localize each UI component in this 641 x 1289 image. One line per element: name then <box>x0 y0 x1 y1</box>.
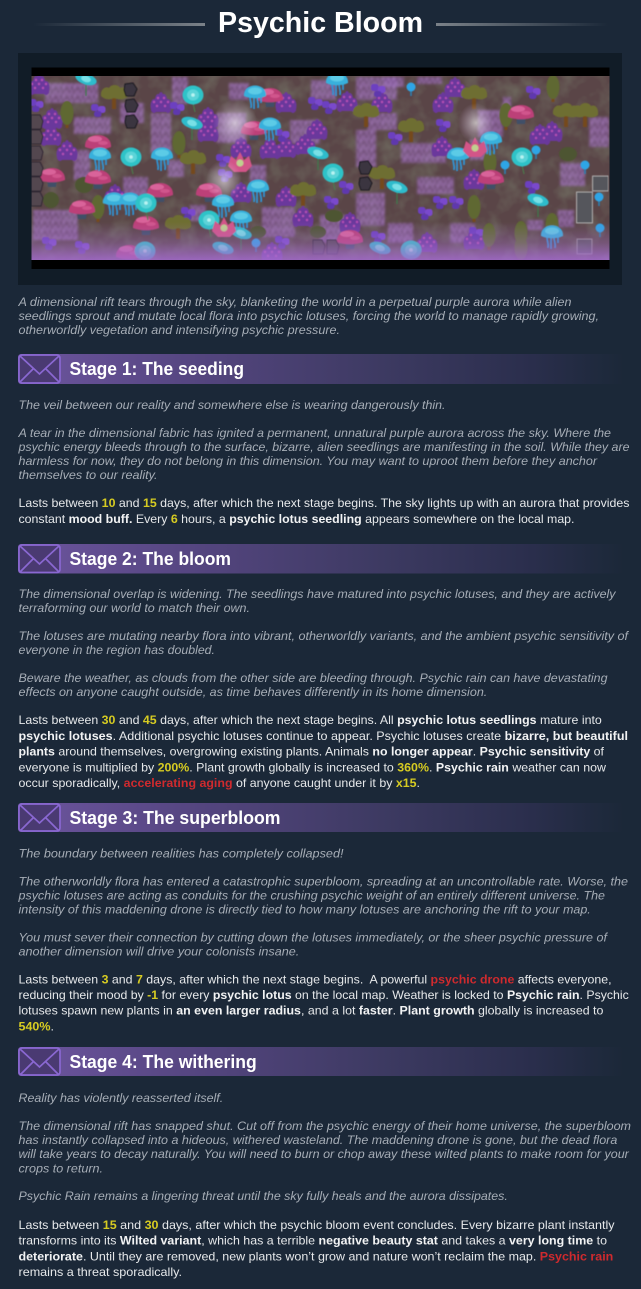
effects line 1: Lasts between 15 and 30 days, after which the psychic bloom event concludes. Every bizarre plant instantly <box>18 1218 614 1232</box>
intro text: A dimensional rift tears through the sky, blanketing the world in a perpetual purple aurora while alien <box>17 295 572 309</box>
flavour paragraph: A tear in the dimensional fabric has ignited a permanent, unnatural purple aurora across the sky. Where the <box>17 426 611 440</box>
flavour paragraph 2: The lotuses are mutating nearby flora into vibrant, otherworldly variants, and the ambient psychic sensitivity of <box>18 629 630 643</box>
stage 4 flavour text <box>18 1091 631 1203</box>
bottom aurora fog <box>32 222 610 260</box>
flavour paragraph: crops to return. <box>18 1161 103 1175</box>
flavour paragraph 2: another dimension will drive your colonists insane. <box>18 944 299 958</box>
stage 1 effects text <box>18 496 630 526</box>
flavour paragraph 1: The dimensional overlap is widening. The seedlings have matured into psychic lotuses, and they are actively <box>18 587 617 601</box>
stage 1 flavour text <box>17 398 630 482</box>
effects line 2: psychic lotuses . Additional psychic lotuses continue to appear. Psychic lotuses create bizarre, but beautiful <box>18 729 628 743</box>
title <box>33 7 608 39</box>
cypress trees <box>60 75 560 263</box>
flavour paragraph: will take years to decay naturally. You will need to burn or chop away these wilted plants to make room for your <box>18 1147 630 1161</box>
panel: scene image frame <box>18 53 622 285</box>
image frame background <box>18 53 622 285</box>
mauve rocks <box>31 115 339 254</box>
small green shrubs <box>43 147 577 238</box>
title rule left <box>33 23 205 26</box>
scene sprites <box>28 70 608 268</box>
stage 2 header <box>18 544 624 574</box>
effects line 3: lotuses spawn new plants in an even larger radius , and a lot faster. Plant growth globally is increased to <box>18 1004 604 1018</box>
stage 4 header <box>18 1047 624 1076</box>
stage 2 flavour text <box>18 587 630 699</box>
effects line 4: everyone is multiplied by 200%. Plant growth globally is increased to 360%. Psychic rain weather can now <box>18 760 606 774</box>
ground <box>32 76 610 260</box>
icon: envelope <box>19 804 60 831</box>
ground mottling <box>32 76 610 260</box>
stage 1 header <box>18 354 624 384</box>
blue jellyfish plants <box>89 72 563 249</box>
flavour paragraph: has instantly collapsed into a hideous, withered wasteland. The maddening drone is gone, but the dead flora <box>18 1133 618 1147</box>
stage 3 title: Stage 3: The superbloom <box>70 808 280 828</box>
header bar <box>18 354 624 384</box>
intro text: otherworldly vegetation and intensifying psychic pressure. <box>18 323 340 337</box>
effects line 1: Lasts between 30 and 45 days, after which the next stage begins. All psychic lotus seedlings mature into <box>18 713 602 727</box>
header bar <box>18 803 624 832</box>
stage 4 title: Stage 4: The withering <box>70 1052 257 1072</box>
effects line 5: occur sporadically, accelerating aging of anyone caught under it by x15. <box>18 776 420 790</box>
header bar <box>18 544 624 574</box>
flavour paragraph: The dimensional rift has snapped shut. Cut off from the psychic energy of their home universe, the superbloom <box>18 1119 631 1133</box>
intro text: seedlings sprout and mutate local flora into psychic lotuses, forcing the world to manage rapidly growing, <box>18 309 599 323</box>
stage 1 title: Stage 1: The seeding <box>70 359 244 379</box>
flavour paragraph: themselves to our reality. <box>18 468 158 482</box>
effects line 3: deteriorate. Until they are removed, new plants won’t grow and nature won’t reclaim the map. Psychic rain <box>18 1249 613 1263</box>
game scene illustration <box>28 70 610 268</box>
dark rocks <box>124 83 372 190</box>
effects line 1: Lasts between 3 and 7 days, after which the next stage begins. A powerful psychic drone affects everyone, <box>18 972 612 986</box>
title rule right <box>436 23 608 26</box>
image letterbox <box>32 68 610 269</box>
stage 3 effects text <box>18 972 629 1033</box>
tilted cyan plants <box>74 70 550 265</box>
violet cube clusters <box>29 84 540 254</box>
flavour line: The boundary between realities has completely collapsed! <box>18 846 344 860</box>
effects line 4: remains a threat sporadically. <box>18 1265 182 1279</box>
flavour paragraph 1: The otherworldly flora has entered a catastrophic superbloom, spreading at an uncontrollable rate. Worse, the <box>18 874 628 888</box>
small blue bulbs <box>252 82 604 252</box>
effects line 2: transforms into its Wilted variant, which has a terrible negative beauty stat and takes a very long time to <box>18 1234 607 1248</box>
effects line 2: reducing their mood by -1 for every psychic lotus on the local map. Weather is locked to Psychic rain. Psychic <box>18 988 629 1002</box>
icon: envelope <box>19 545 60 572</box>
lotus flowers <box>212 137 487 237</box>
cyan orb plants <box>120 86 532 268</box>
flavour paragraph 3: effects on anyone caught outside, as time behaves differently in its home dimension. <box>18 685 487 699</box>
stage 2 effects text <box>18 713 628 790</box>
flavour paragraph 2: everyone in the region has doubled. <box>18 643 215 657</box>
flavour line: The veil between our reality and somewhere else is wearing dangerously thin. <box>18 398 446 412</box>
purple grass patches <box>33 77 609 243</box>
crystal clusters <box>28 74 562 263</box>
stage 3 header <box>18 803 624 832</box>
effects line 2: constant mood buff. Every 6 hours, a psychic lotus seedling appears somewhere on the local map. <box>18 512 574 526</box>
flavour paragraph 1: intensity of this maddening drone is directly tied to how many lotuses are anchoring the rift to your map. <box>18 902 591 916</box>
flavour paragraph: psychic energy bleeds through to the surface, bizarre, alien seedlings are manifesting in the soil. While they are <box>17 440 630 454</box>
flavour paragraph 2: You must sever their connection by cutting down the lotuses immediately, or the sheer psychic pressure of <box>18 930 609 944</box>
effects line 4: 540%. <box>18 1019 54 1033</box>
pink mushrooms <box>39 88 534 264</box>
stage 3 flavour text <box>17 846 628 958</box>
grey machines <box>576 176 608 254</box>
effects line 3: plants around themselves, overgrowing existing plants. Animals no longer appear. Psychic sensitivity of <box>18 745 605 759</box>
flavour paragraph 3: Beware the weather, as clouds from the other side are bleeding through. Psychic rain can have devastating <box>18 671 608 685</box>
stage 2 title: Stage 2: The bloom <box>70 549 231 569</box>
icon: envelope <box>19 1048 60 1075</box>
olive trees <box>101 85 598 239</box>
title text: Psychic Bloom <box>218 7 423 39</box>
icon: envelope <box>19 355 60 383</box>
flavour paragraph: harmless for now, they do not belong in this dimension. You may want to uproot them before they anchor <box>18 454 598 468</box>
flavour line 1: Reality has violently reasserted itself. <box>18 1091 223 1105</box>
flavour line 2: Psychic Rain remains a lingering threat until the sky fully heals and the aurora dissipates. <box>18 1189 508 1203</box>
flavour paragraph 1: terraforming our world to match their own. <box>18 601 250 615</box>
stage 4 effects text <box>18 1218 614 1279</box>
header bar <box>18 1047 624 1076</box>
effects line 1: Lasts between 10 and 15 days, after which the next stage begins. The sky lights up with an aurora that provides <box>18 496 630 510</box>
flavour paragraph 1: psychic lotuses are acting as conduits for the crushing psychic weight of an entirely different universe. The <box>17 888 605 902</box>
light glows <box>206 99 494 200</box>
